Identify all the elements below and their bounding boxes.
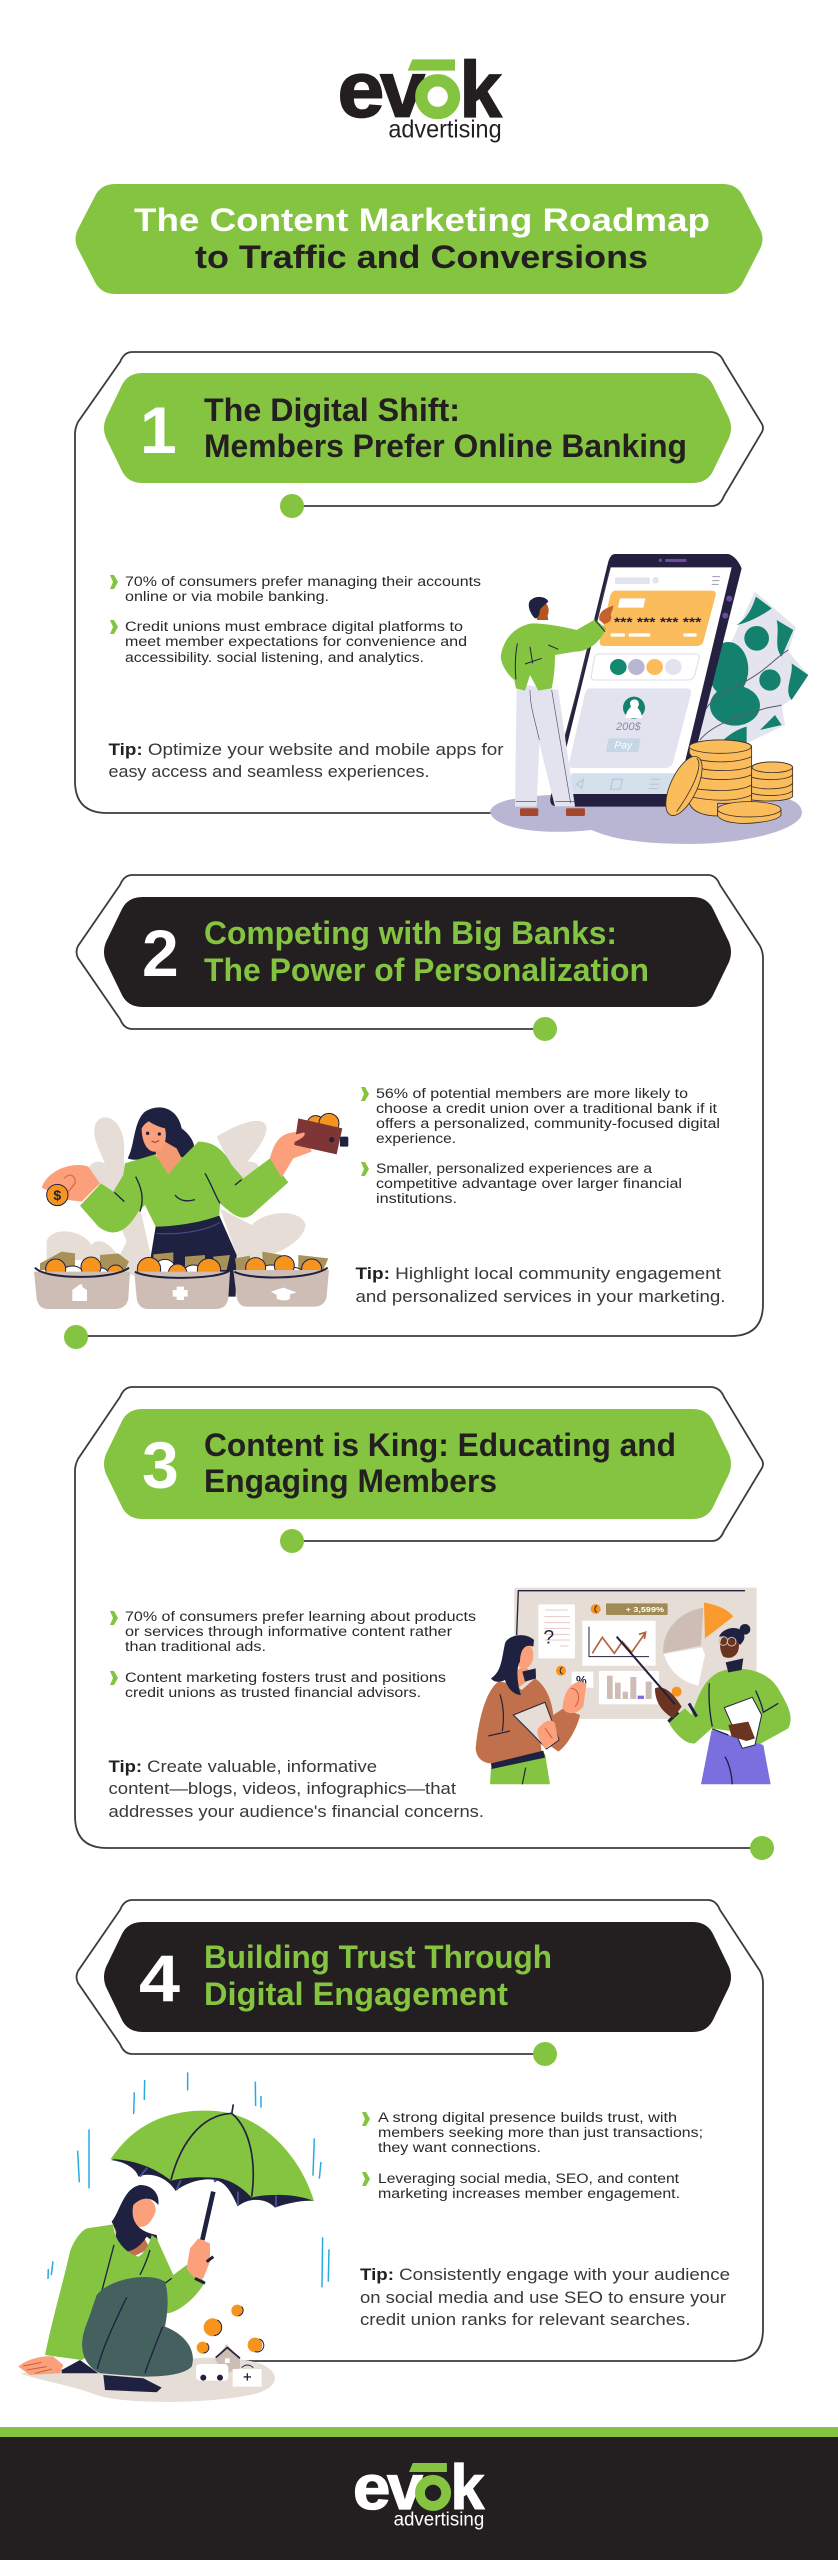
panel 2 bullets: choose a credit union over a traditional bank if it — [376, 1101, 717, 1117]
title banner: The Content Marketing Roadmap — [134, 202, 710, 238]
panel 4 outline — [76, 1900, 763, 2361]
footer band — [0, 2427, 838, 2560]
illustration: man using banking phone with coins and cash — [490, 554, 808, 844]
illustration: woman sorting coins into baskets: $ — [53, 1187, 61, 1203]
panel 1 bullets: online or via mobile banking. — [125, 589, 329, 605]
illustration: two women presenting a chart board: % — [576, 1673, 587, 1687]
logo: evok advertising: e — [338, 46, 384, 134]
panel 1 heading: Members Prefer Online Banking — [204, 428, 687, 464]
panel 2 heading: Competing with Big Banks: — [204, 915, 617, 951]
panel 1 bullets: 70% of consumers prefer managing their accounts — [125, 574, 481, 590]
panel 3 heading: Engaging Members — [204, 1463, 497, 1499]
panel 3 bullets: 70% of consumers prefer learning about products — [125, 1609, 476, 1625]
panel 3 tip: addresses your audience's financial concerns. — [108, 1802, 484, 1821]
panel 4 bullets: members seeking more than just transactions; — [378, 2125, 703, 2141]
panel 2 bullets: 56% of potential members are more likely to — [376, 1086, 688, 1102]
panel 1 bullets — [110, 574, 481, 666]
panel 3 connector dots — [280, 1529, 774, 1860]
panel 2 heading — [104, 897, 731, 1007]
panel 4 heading: 4 — [139, 1941, 180, 2015]
panel 4 tip — [360, 2265, 730, 2329]
panel 2 heading: The Power of Personalization — [204, 952, 649, 988]
panel 4 bullets: A strong digital presence builds trust, with — [378, 2110, 677, 2126]
panel 4 connector dot — [533, 2042, 557, 2066]
panel 2 bullets: institutions. — [376, 1191, 457, 1207]
illustration: two women presenting a chart board — [476, 1588, 791, 1784]
footer logo: e — [353, 2453, 390, 2523]
logo: evok advertising — [338, 46, 502, 143]
panel 4 heading: Digital Engagement — [204, 1976, 508, 2012]
panel 2 bullets: offers a personalized, community-focused digital — [376, 1116, 720, 1132]
panel 3 bullets: or services through informative content rather — [125, 1624, 452, 1640]
panel 2 outline — [76, 875, 763, 1336]
illustration: two women presenting a chart board: ? — [543, 1627, 554, 1648]
illustration: woman sorting coins into baskets — [34, 1107, 348, 1309]
panel 4 heading — [104, 1922, 731, 2032]
panel 1 bullets: Credit unions must embrace digital platforms to — [125, 619, 463, 635]
panel 1 outline — [75, 352, 763, 813]
logo: evok advertising: advertising — [388, 116, 502, 143]
panel 3 bullets — [110, 1609, 476, 1701]
logo: evok advertising: k — [460, 46, 502, 134]
panel 3 bullets: than traditional ads. — [125, 1639, 266, 1655]
panel 2 connector dots — [64, 1017, 557, 1349]
panel 2 tip: and personalized services in your marketing. — [356, 1287, 726, 1306]
panel 2 tip — [356, 1264, 726, 1306]
panel 1: the digital shift — [75, 352, 808, 844]
panel 2: competing with big banks — [34, 875, 763, 1349]
panel 4 bullets: Leveraging social media, SEO, and content — [378, 2171, 679, 2187]
footer logo: v — [387, 2453, 423, 2523]
panel 1 tip — [108, 740, 504, 781]
panel 4: building trust — [18, 1900, 763, 2402]
panel 3 heading — [104, 1409, 731, 1519]
panel 3 bullets: credit unions as trusted financial advisors. — [125, 1685, 421, 1701]
panel 3 tip: Tip: Create valuable, informative — [108, 1757, 377, 1776]
panel 4 bullets: they want connections. — [378, 2140, 541, 2156]
panel 1 connector dot — [280, 494, 304, 518]
panel 3 tip: content—blogs, videos, infographics—that — [108, 1779, 456, 1798]
panel 1 heading — [104, 373, 731, 483]
panel 3: content is king — [75, 1387, 791, 1860]
footer logo — [353, 2453, 485, 2530]
panel 3 heading: 3 — [142, 1428, 179, 1502]
panel 3 heading: Content is King: Educating and — [204, 1427, 676, 1463]
illustration: man using banking phone with coins and cash: *** *** *** *** — [614, 616, 701, 630]
panel 2 heading: 2 — [142, 916, 179, 990]
panel 3 tip — [108, 1757, 484, 1821]
panel 1 tip: Tip: Optimize your website and mobile apps for — [108, 740, 504, 759]
panel 2 bullets: experience. — [376, 1131, 456, 1147]
panel 2 tip: Tip: Highlight local community engagement — [356, 1264, 721, 1283]
panel 2 bullets: competitive advantage over larger financial — [376, 1176, 682, 1192]
title banner — [76, 184, 762, 294]
panel 3 outline — [75, 1387, 763, 1848]
panel 2 bullets — [361, 1086, 720, 1207]
panel 4 bullets: marketing increases member engagement. — [378, 2186, 680, 2202]
logo: evok advertising: v — [380, 46, 425, 134]
footer logo: advertising — [394, 2508, 484, 2530]
title banner: to Traffic and Conversions — [195, 239, 648, 275]
panel 1 heading: 1 — [140, 393, 177, 467]
panel 1 bullets: meet member expectations for convenience and — [125, 634, 467, 650]
illustration: woman under umbrella protecting home and savings — [18, 2072, 329, 2402]
panel 1 bullets: accessibility. social listening, and analytics. — [125, 650, 424, 666]
panel 1 heading: The Digital Shift: — [204, 392, 460, 428]
illustration: man using banking phone with coins and cash: Pay — [614, 741, 633, 752]
panel 3 bullets: Content marketing fosters trust and positions — [125, 1670, 446, 1686]
panel 4 tip: credit union ranks for relevant searches. — [360, 2310, 690, 2329]
panel 4 heading: Building Trust Through — [204, 1939, 552, 1975]
panel 2 bullets: Smaller, personalized experiences are a — [376, 1161, 652, 1177]
panel 4 bullets — [362, 2110, 703, 2202]
panel 4 tip: on social media and use SEO to ensure your — [360, 2288, 726, 2307]
illustration: two women presenting a chart board: + 3,599% — [626, 1605, 665, 1614]
panel 1 tip: easy access and seamless experiences. — [108, 762, 430, 781]
panel 4 tip: Tip: Consistently engage with your audience — [360, 2265, 730, 2284]
footer logo: k — [451, 2453, 485, 2523]
illustration: man using banking phone with coins and cash: 200$ — [615, 721, 642, 733]
